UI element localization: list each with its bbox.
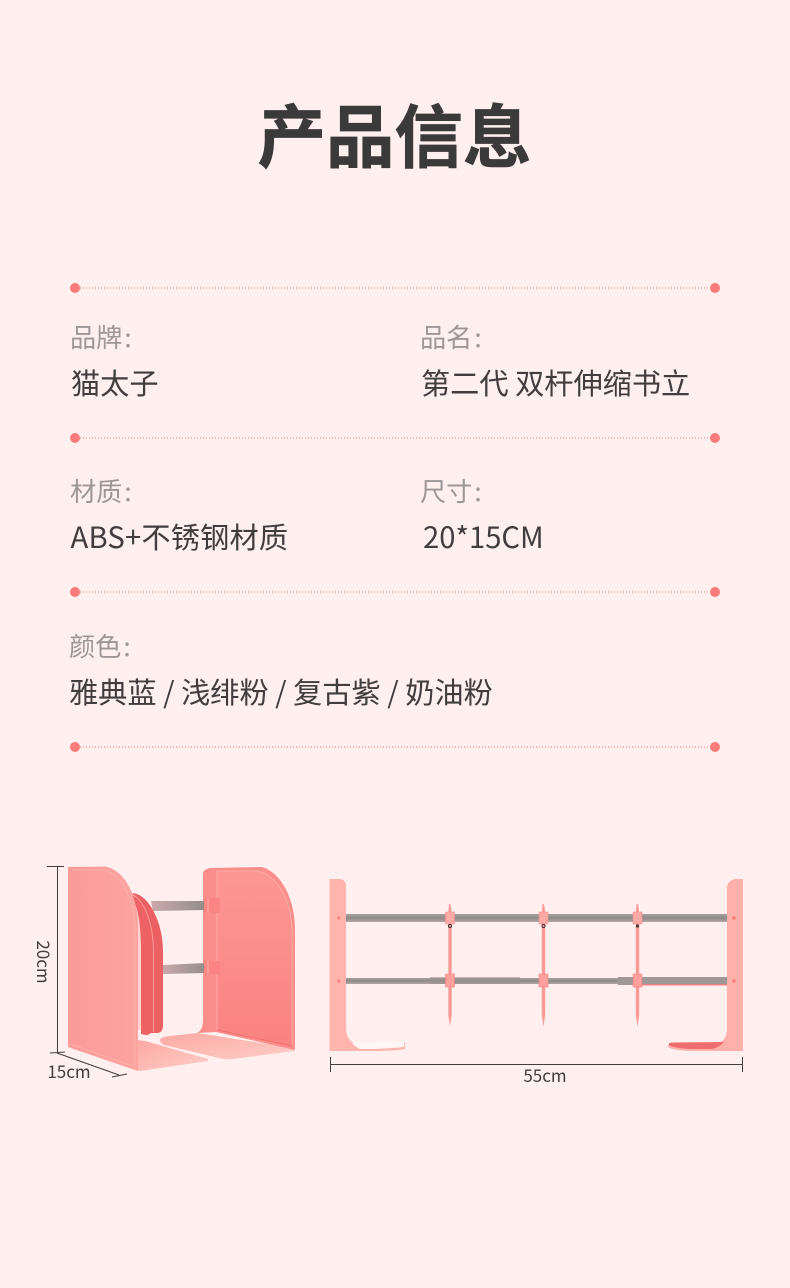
spec: size: 尺寸:: [420, 471, 482, 509]
spec: colours: 颜色:: [69, 626, 131, 664]
spec: brand: 品牌:: [70, 317, 132, 355]
divider plate 3: [633, 904, 642, 1027]
divider row 4: [70, 742, 720, 752]
spec: size: 20*15CM: [423, 515, 544, 557]
spec: material: [70, 471, 288, 557]
upper rod: [346, 914, 727, 922]
steel rods: [151, 898, 220, 974]
right bracket: [668, 879, 743, 1051]
spec: product name: 品名:: [420, 317, 482, 355]
spec: product name: [420, 317, 690, 403]
spec: colours: 雅典蓝 / 浅绯粉 / 复古紫 / 奶油粉: [69, 670, 493, 712]
divider row 3: [70, 587, 720, 597]
left bookend: [68, 866, 208, 1071]
lower rod: [346, 977, 727, 986]
right bookend: [160, 867, 295, 1059]
divider row 2: [70, 433, 720, 443]
spec: material: 材质:: [70, 471, 132, 509]
product photo: bookend pair, closed: [68, 866, 295, 1071]
divider plate 1: [446, 904, 454, 1027]
spec: size: [420, 471, 544, 557]
spec: colours: [69, 626, 493, 712]
dimension: width 55cm: 55cm: [523, 1062, 567, 1087]
spec: brand: 猫太子: [71, 361, 159, 403]
dimension: height 20cm: 20cm: [32, 940, 57, 984]
divider plate 2: [539, 904, 548, 1027]
dimension: depth 15cm: [47, 1052, 127, 1083]
product photo: bookend extended front view: [330, 879, 743, 1051]
dimension: depth 15cm: 15cm: [47, 1058, 91, 1083]
spec: product name: 第二代 双杆伸缩书立: [421, 361, 690, 403]
divider row 1: [70, 283, 720, 293]
stacked divider plates: [132, 893, 163, 1035]
spec: material: ABS+不锈钢材质: [70, 515, 288, 557]
left bracket: [330, 879, 405, 1051]
title: 产品信息: [257, 83, 532, 182]
spec: brand: [70, 317, 159, 403]
